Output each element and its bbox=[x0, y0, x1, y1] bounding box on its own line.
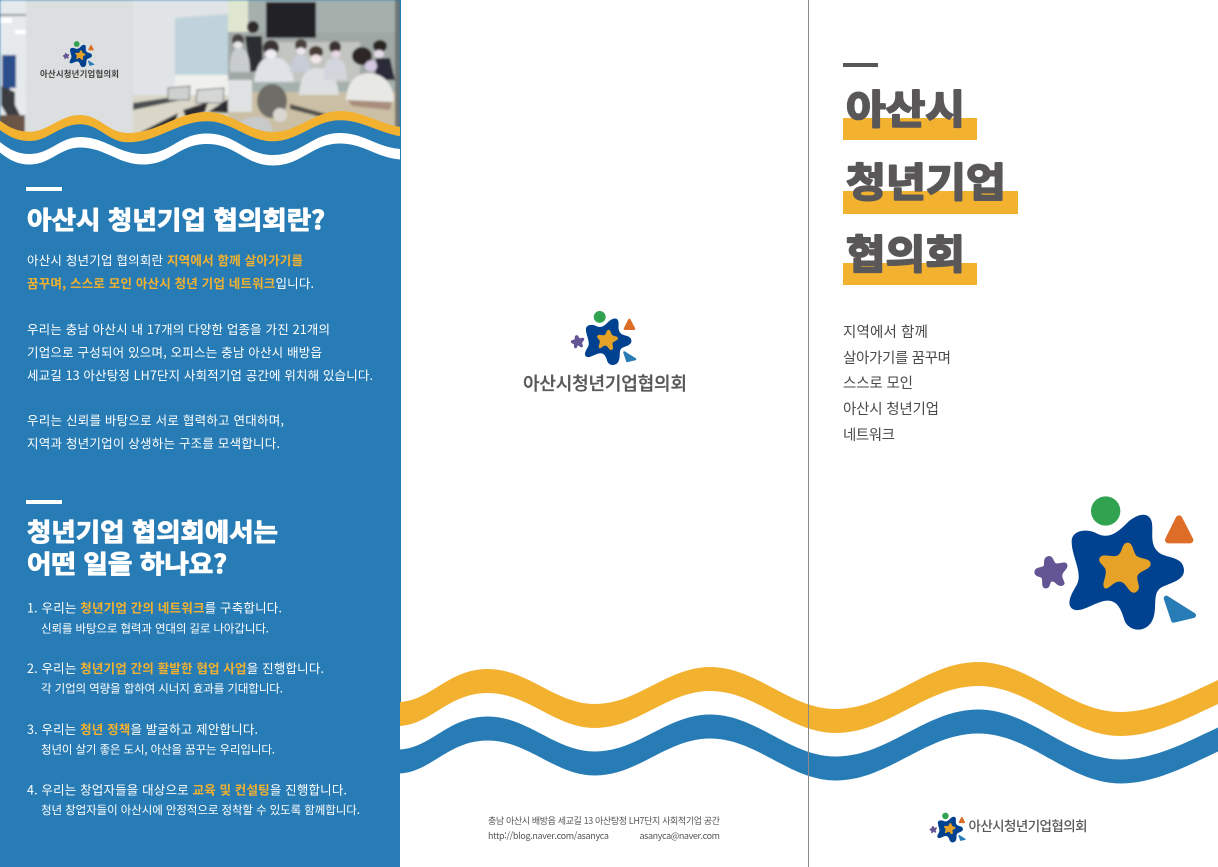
text block: introduction: 아산시 청년기업 협의회란 지역에서 함께 살아가기를 bbox=[27, 250, 303, 269]
list item 2: 2. 우리는 청년기업 간의 활발한 협업 사업을 진행합니다. bbox=[27, 658, 324, 677]
text block: cover tagline: 스스로 모인 bbox=[843, 372, 913, 393]
title: cover heading: 청년기업 bbox=[846, 150, 1006, 208]
panel: left blue column bbox=[0, 0, 401, 867]
logo: centre panel bbox=[523, 311, 687, 396]
text block: introduction: 세교길 13 아산탕정 LH7단지 사회적기업 공간에 위치해 있습니다. bbox=[27, 365, 373, 384]
text block: contact details: 충남 아산시 배방읍 세교길 13 아산탕정 LH7단지 사회적기업 공간 bbox=[488, 814, 720, 827]
list item 1: 신뢰를 바탕으로 협력과 연대의 길로 나아갑니다. bbox=[41, 620, 269, 636]
title: cover heading: 아산시 bbox=[846, 78, 965, 136]
text block: cover tagline: 지역에서 함께 bbox=[843, 321, 928, 342]
logo on photo wall bbox=[40, 41, 119, 80]
logo: centre panel: 아산시청년기업협의회 bbox=[523, 370, 687, 396]
heading: what does the association do: 청년기업 협의회에서는 bbox=[27, 513, 278, 549]
bar: cover accent bbox=[843, 63, 878, 67]
logo: cover footer: 아산시청년기업협의회 bbox=[968, 815, 1088, 835]
text block: introduction: 꿈꾸며, 스스로 모인 아산시 청년 기업 네트워크입니다. bbox=[27, 273, 314, 292]
text block: cover tagline: 살아가기를 꿈꾸며 bbox=[843, 347, 951, 368]
icon: large logo mark bbox=[1034, 496, 1193, 630]
logo: cover footer bbox=[930, 813, 1088, 842]
wave: large blue band bbox=[400, 710, 1218, 784]
heading: what does the association do bbox=[27, 513, 278, 581]
text block: introduction: 기업으로 구성되어 있으며, 오피스는 충남 아산시 배방읍 bbox=[27, 342, 322, 361]
logo on photo wall: 아산시청년기업협의회 bbox=[40, 68, 119, 80]
list item 1: 1. 우리는 청년기업 간의 네트워크를 구축합니다. bbox=[27, 598, 282, 616]
wave: yellow stripe bbox=[0, 111, 400, 190]
bar: section two bbox=[26, 500, 62, 504]
wave: blue under white bbox=[0, 144, 400, 200]
text block: cover tagline: 네트워크 bbox=[843, 424, 895, 445]
list item 4: 4. 우리는 창업자들을 대상으로 교육 및 컨설팅을 진행합니다. bbox=[27, 780, 347, 798]
text block: cover tagline: 아산시 청년기업 bbox=[843, 398, 939, 419]
wave: blue under yellow bbox=[0, 120, 400, 199]
panel: office and meeting photo bbox=[0, 0, 400, 145]
list item 3: 청년이 살기 좋은 도시, 아산을 꿈꾸는 우리입니다. bbox=[41, 742, 275, 758]
text block: contact details: http://blog.naver.com/asanyca bbox=[488, 829, 609, 842]
text block: introduction: 지역과 청년기업이 상생하는 구조를 모색합니다. bbox=[27, 433, 280, 452]
text block: introduction: 우리는 신뢰를 바탕으로 서로 협력하고 연대하며, bbox=[27, 410, 284, 429]
wave: large yellow band bbox=[400, 662, 1218, 736]
list item 2 bbox=[27, 658, 324, 696]
list item 3 bbox=[27, 719, 275, 758]
text block: contact details: asanyca@naver.com bbox=[640, 829, 720, 842]
list item 4: 청년 창업자들이 아산시에 안정적으로 정착할 수 있도록 함께합니다. bbox=[41, 802, 360, 818]
heading: what does the association do: 어떤 일을 하나요? bbox=[27, 545, 227, 581]
list item 4 bbox=[27, 780, 360, 818]
text block: cover tagline bbox=[843, 321, 951, 445]
text block: introduction: 우리는 충남 아산시 내 17개의 다양한 업종을 가진 21개의 bbox=[27, 319, 330, 338]
title: cover heading bbox=[843, 78, 1018, 285]
list item 3: 3. 우리는 청년 정책을 발굴하고 제안합니다. bbox=[27, 719, 258, 738]
text block: introduction bbox=[27, 250, 373, 452]
title: cover heading: 협의회 bbox=[846, 222, 965, 280]
text block: contact details bbox=[488, 814, 720, 842]
bar: section one bbox=[26, 187, 62, 191]
list item 2: 각 기업의 역량을 합하여 시너지 효과를 기대합니다. bbox=[41, 680, 283, 696]
wave: white stripe bbox=[0, 133, 400, 190]
heading: what is the association: 아산시 청년기업 협의회란? bbox=[27, 201, 325, 237]
list item 1 bbox=[27, 598, 282, 636]
